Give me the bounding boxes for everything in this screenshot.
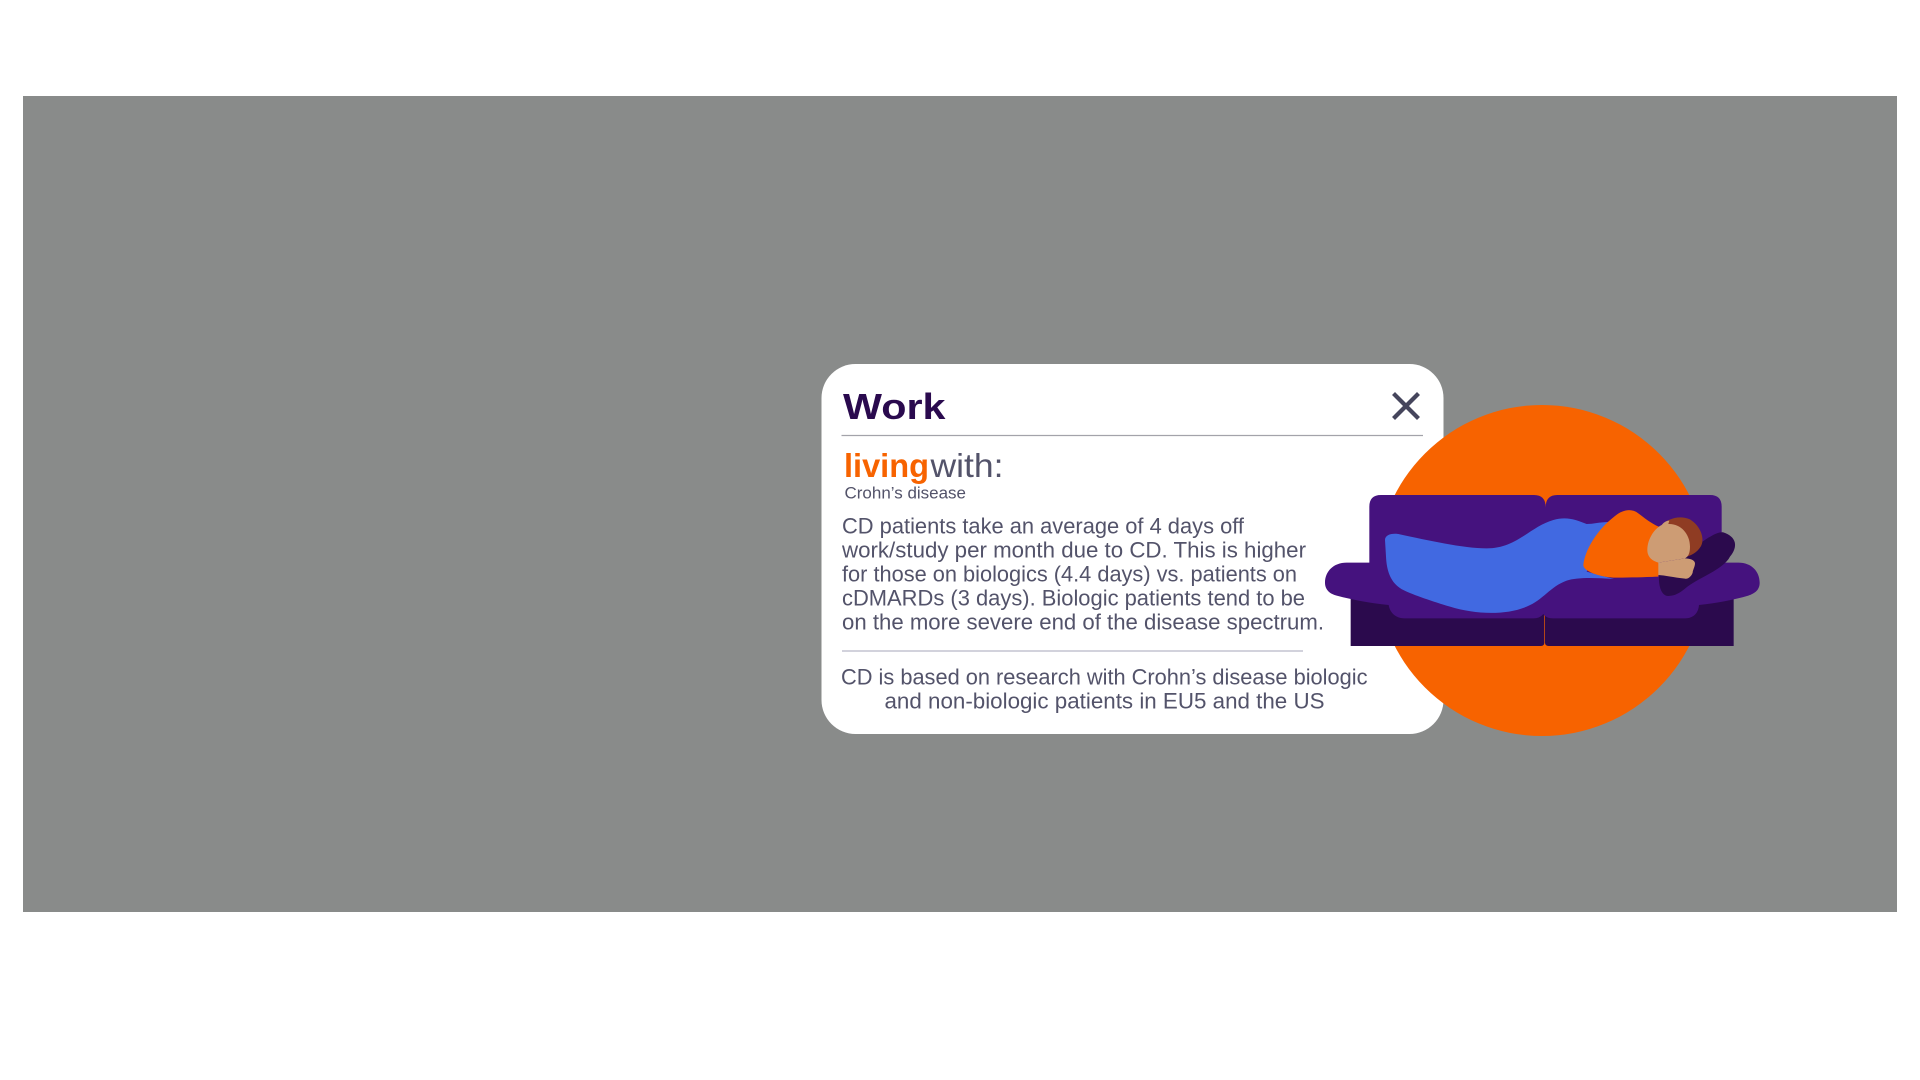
subtitle: Crohn's disease: Crohn’s disease — [844, 484, 966, 502]
heading: Work: Work — [843, 386, 947, 427]
logo: living with: with: — [929, 447, 1004, 484]
body text: for those on biologics (4.4 days) vs. patients on — [842, 562, 1297, 586]
blanket — [1385, 518, 1614, 613]
footnote text: and non-biologic patients in EU5 and the US — [884, 688, 1324, 714]
panel: work card — [822, 364, 1444, 734]
grey backdrop panel — [23, 96, 1897, 912]
footnote text: CD is based on research with Crohn’s disease biologic — [841, 664, 1368, 690]
face — [1647, 521, 1690, 563]
body text — [841, 514, 1324, 634]
orange circle — [1376, 405, 1708, 736]
logo: living with: living — [844, 447, 929, 484]
icon: close — [1395, 395, 1417, 417]
body text: on the more severe end of the disease spectrum. — [842, 610, 1324, 634]
logo: living with — [844, 447, 1004, 484]
pillow — [1659, 532, 1735, 596]
sofa base — [1351, 590, 1734, 646]
sofa body — [1325, 495, 1760, 618]
body text: CD patients take an average of 4 days off — [842, 514, 1245, 538]
arm — [1658, 558, 1695, 579]
hair — [1662, 517, 1702, 557]
torso — [1583, 510, 1661, 578]
body text: cDMARDs (3 days). Biologic patients tend to be — [842, 586, 1305, 610]
illustration: person lying on sofa — [1325, 495, 1760, 646]
footnote text — [841, 664, 1368, 714]
body text: work/study per month due to CD. This is higher — [841, 538, 1306, 562]
